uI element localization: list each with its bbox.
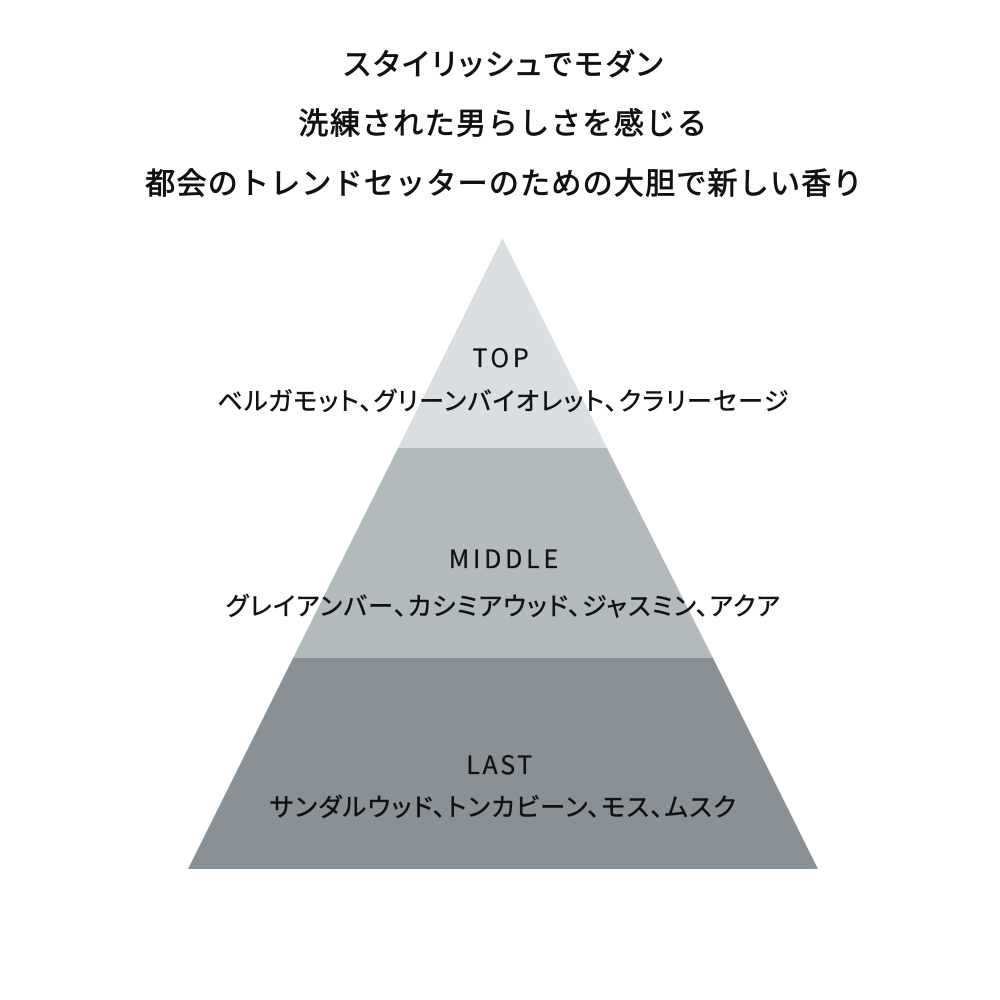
title line 1: スタイリッシュでモダン xyxy=(343,40,666,84)
label: LAST: LAST xyxy=(466,746,535,782)
title xyxy=(145,40,864,203)
label: TOP: TOP xyxy=(472,339,533,375)
pyramid tier: top xyxy=(398,238,607,448)
pyramid tier: last xyxy=(188,658,818,869)
notes: top: ベルガモット、グリーンバイオレット、クラリーセージ xyxy=(217,382,790,418)
label: MIDDLE: MIDDLE xyxy=(449,540,562,576)
pyramid tier: middle xyxy=(293,448,713,658)
notes: last: サンダルウッド、トンカビーン、モス、ムスク xyxy=(270,788,737,824)
title line 2: 洗練された男らしさを感じる xyxy=(298,99,709,143)
title line 3: 都会のトレンドセッターのための大胆で新しい香り xyxy=(145,159,864,203)
notes: middle: グレイアンバー、カシミアウッド、ジャスミン、アクア xyxy=(226,587,781,623)
